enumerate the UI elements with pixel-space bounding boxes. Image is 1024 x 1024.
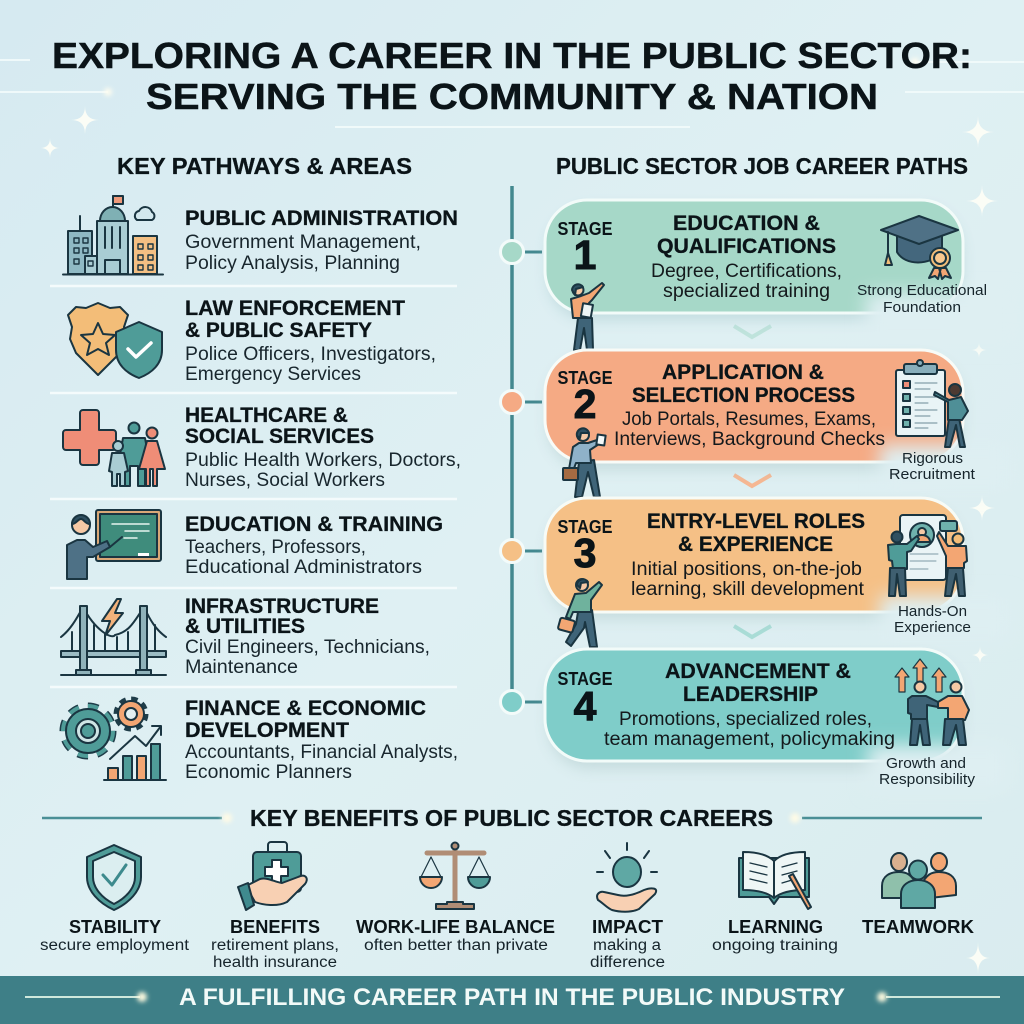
icon: badge and shield xyxy=(68,303,162,378)
benefit: stability xyxy=(40,845,190,954)
text: impact xyxy=(590,916,665,971)
stage 2 label: 2 xyxy=(574,381,596,427)
text: learning xyxy=(712,916,838,954)
text: healthcare: HEALTHCARE & xyxy=(185,403,348,427)
stage 4 label: 4 xyxy=(574,683,597,729)
timeline xyxy=(500,186,542,714)
heading: key benefits: KEY BENEFITS OF PUBLIC SECTOR CAREERS xyxy=(250,805,773,831)
icon: three people xyxy=(882,853,956,908)
icon: person with resume and briefcase xyxy=(563,428,606,497)
stage 2 text: Interviews, Background Checks xyxy=(614,429,885,450)
text: impact: IMPACT xyxy=(592,916,664,937)
heading: career paths: PUBLIC SECTOR JOB CAREER PATHS xyxy=(556,153,968,179)
stage 3 text xyxy=(631,509,865,600)
stage 1 text: EDUCATION & xyxy=(673,211,820,235)
benefit: impact xyxy=(590,843,665,971)
text: public administration: PUBLIC ADMINISTRATION xyxy=(185,206,458,230)
text: public administration: Government Management, xyxy=(185,232,421,253)
stage 3 text: Initial positions, on-the-job xyxy=(631,559,862,580)
text: public administration xyxy=(185,206,458,274)
text: healthcare: SOCIAL SERVICES xyxy=(185,424,374,448)
text: impact: difference xyxy=(590,954,665,971)
text: work-life balance: WORK-LIFE BALANCE xyxy=(356,916,555,937)
stage 4 text: Promotions, specialized roles, xyxy=(619,709,872,730)
stage 4 label xyxy=(558,668,612,729)
caption: growth and responsibility: Growth and xyxy=(886,756,966,772)
stage 2 text: SELECTION PROCESS xyxy=(632,383,855,407)
text: benefits: BENEFITS xyxy=(230,916,320,937)
pathway: healthcare xyxy=(63,403,461,491)
text: law enforcement: & PUBLIC SAFETY xyxy=(185,318,372,342)
stage 3 label: STAGE xyxy=(558,516,612,537)
text: education: Teachers, Professors, xyxy=(185,537,366,558)
title: EXPLORING A CAREER IN THE PUBLIC SECTOR: xyxy=(52,35,972,76)
icon: gears and growth chart xyxy=(64,700,166,780)
text: work-life balance: often better than private xyxy=(364,937,548,954)
text: healthcare: Nurses, Social Workers xyxy=(185,470,385,491)
stage 2 text xyxy=(614,360,885,450)
icon: hand holding medical kit xyxy=(238,842,307,910)
caption: rigorous recruitment xyxy=(889,451,975,483)
caption: hands-on experience: Experience xyxy=(894,620,971,636)
text: education xyxy=(185,512,443,578)
caption: hands-on experience xyxy=(894,604,971,636)
text: benefits xyxy=(211,916,339,971)
stage 1 xyxy=(545,200,1016,350)
text: finance xyxy=(185,696,458,783)
caption: strong educational foundation: Foundation xyxy=(883,300,961,316)
text: finance: DEVELOPMENT xyxy=(185,718,349,742)
caption: strong educational foundation xyxy=(857,283,987,316)
stage 4 text: team management, policymaking xyxy=(604,729,895,750)
stage 1 text xyxy=(651,211,842,302)
icon: two people reviewing a profile xyxy=(888,515,967,596)
text: infrastructure: Maintenance xyxy=(185,657,298,678)
icon: teacher at chalkboard xyxy=(67,510,161,579)
footer banner xyxy=(0,976,1024,1024)
footer banner: A FULFILLING CAREER PATH IN THE PUBLIC INDUSTRY xyxy=(179,984,845,1011)
icon: balance scale xyxy=(420,842,490,909)
stage 4 xyxy=(545,649,1008,790)
icon: open book with pencil xyxy=(739,852,811,909)
pathway: education xyxy=(67,510,443,579)
text: finance: Economic Planners xyxy=(185,762,352,783)
pathway: law enforcement xyxy=(68,296,436,385)
stage 2 text: Job Portals, Resumes, Exams, xyxy=(622,409,876,430)
stage 3 text: & EXPERIENCE xyxy=(678,532,833,556)
text: work-life balance xyxy=(356,916,555,954)
pathway: finance xyxy=(64,696,458,783)
title xyxy=(52,35,972,117)
icon: person pointing up xyxy=(571,283,604,350)
stage 3 label: 3 xyxy=(574,530,596,576)
text: law enforcement: LAW ENFORCEMENT xyxy=(185,296,405,320)
text: public administration: Policy Analysis, Planning xyxy=(185,253,400,274)
text: benefits: retirement plans, xyxy=(211,937,339,954)
stage 2 label: STAGE xyxy=(558,367,612,388)
caption: rigorous recruitment: Rigorous xyxy=(902,451,963,467)
icon: government buildings xyxy=(63,196,163,274)
text: stability xyxy=(40,916,190,954)
stage 4 text: ADVANCEMENT & xyxy=(665,659,851,683)
panel: career paths xyxy=(500,153,1016,790)
benefit: teamwork xyxy=(862,853,975,937)
icon: shield check xyxy=(87,845,141,910)
stage 3 text: learning, skill development xyxy=(631,579,865,600)
text: finance: FINANCE & ECONOMIC xyxy=(185,696,426,720)
caption: strong educational foundation: Strong Educational xyxy=(857,283,987,299)
text: law enforcement xyxy=(185,296,436,385)
text: stability: STABILITY xyxy=(69,916,162,937)
pathway: infrastructure xyxy=(61,594,430,678)
icon: bridge and lightning xyxy=(61,599,166,675)
icon: person walking with briefcase xyxy=(558,579,602,647)
text: healthcare: Public Health Workers, Doctors, xyxy=(185,450,461,471)
text: infrastructure xyxy=(185,594,430,678)
text: law enforcement: Police Officers, Investigators, xyxy=(185,344,436,365)
stage 1 text: specialized training xyxy=(663,281,830,302)
heading: key pathways: KEY PATHWAYS & AREAS xyxy=(117,153,412,179)
text: benefits: health insurance xyxy=(213,954,337,971)
stage 4 text: LEADERSHIP xyxy=(683,682,818,706)
icon: two leaders shaking hands with arrows xyxy=(895,659,969,745)
stage 1 card xyxy=(545,200,1016,343)
text: healthcare xyxy=(185,403,461,491)
text: learning: ongoing training xyxy=(712,937,838,954)
text: finance: Accountants, Financial Analysts, xyxy=(185,742,458,763)
benefit: benefits xyxy=(211,842,339,971)
stage 3 label xyxy=(558,516,612,576)
text: law enforcement: Emergency Services xyxy=(185,364,361,385)
arrows between stages xyxy=(734,326,771,637)
benefit: work-life balance xyxy=(356,842,555,954)
stage 2 text: APPLICATION & xyxy=(662,360,824,384)
caption: hands-on experience: Hands-On xyxy=(898,604,967,620)
title: SERVING THE COMMUNITY & NATION xyxy=(146,76,878,117)
panel: key benefits xyxy=(40,805,982,971)
caption: growth and responsibility: Responsibility xyxy=(879,772,976,788)
stage 1 text: Degree, Certifications, xyxy=(651,261,842,282)
text: education: Educational Administrators xyxy=(185,557,422,578)
text: teamwork: TEAMWORK xyxy=(862,916,975,937)
stage 1 label: 1 xyxy=(574,232,596,278)
text: stability: secure employment xyxy=(40,937,190,954)
stage 2 label xyxy=(558,367,612,427)
text: impact: making a xyxy=(593,937,661,954)
caption: growth and responsibility xyxy=(879,756,976,788)
stage 1 text: QUALIFICATIONS xyxy=(657,234,836,258)
stage 1 label: STAGE xyxy=(558,218,612,239)
icon: checklist with person xyxy=(896,360,968,447)
text: infrastructure: & UTILITIES xyxy=(185,614,305,638)
stage 2 xyxy=(545,350,1010,497)
benefit: learning xyxy=(712,852,838,954)
text: infrastructure: Civil Engineers, Technicians, xyxy=(185,637,430,658)
icon: graduation cap with rosette xyxy=(881,216,958,279)
stage 4 text xyxy=(604,659,895,750)
text: learning: LEARNING xyxy=(728,916,823,937)
stage 3 text: ENTRY-LEVEL ROLES xyxy=(647,509,865,533)
icon: medical cross and family xyxy=(63,410,165,486)
icon: hand with sun xyxy=(597,843,657,912)
stage 4 card xyxy=(545,649,1008,790)
caption: rigorous recruitment: Recruitment xyxy=(889,467,975,483)
pathway: public administration xyxy=(63,196,458,274)
stage 3 card xyxy=(545,498,1010,641)
stage 4 label: STAGE xyxy=(558,668,612,689)
stage 3 xyxy=(545,498,1010,647)
panel: key pathways and areas xyxy=(50,153,461,783)
text: education: EDUCATION & TRAINING xyxy=(185,512,443,536)
stage 1 label xyxy=(558,218,612,278)
text: infrastructure: INFRASTRUCTURE xyxy=(185,594,379,618)
stage 2 card xyxy=(545,350,1010,490)
